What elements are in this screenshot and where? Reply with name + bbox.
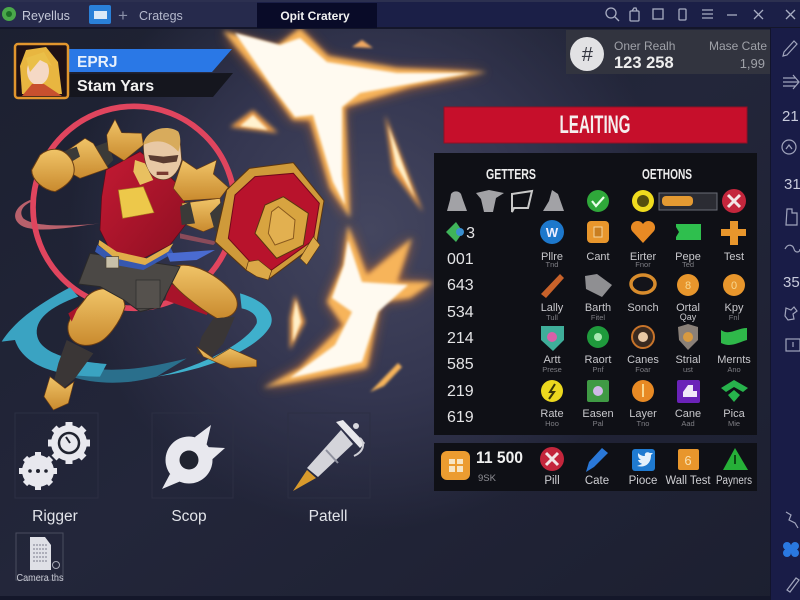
small sublabels: Pal: [593, 419, 604, 428]
row 2 labels: Sonch: [627, 302, 659, 314]
app name: Reyellus: [22, 9, 70, 23]
folder tab icon: [89, 5, 111, 24]
hero character: [2, 106, 324, 410]
chest star: [118, 187, 154, 218]
row numbers: 219: [447, 383, 474, 400]
small sublabels: [542, 260, 741, 428]
row 1 icons: [540, 220, 746, 245]
player badge: [15, 44, 233, 98]
score subtext: 9SK: [478, 473, 497, 484]
right sidebar: [770, 28, 800, 600]
row 4 icons: [541, 380, 748, 403]
icon: yellow coin: [632, 190, 654, 212]
tool: scope: [152, 413, 233, 525]
row numbers: 001: [447, 251, 474, 268]
icon: syringe: [293, 420, 365, 491]
gate label: Mase Cate: [709, 39, 767, 53]
icon: orange grid: [441, 451, 470, 480]
flower icon: [783, 542, 799, 557]
small sublabels: Hoo: [545, 419, 559, 428]
icon: sheet: [30, 537, 60, 570]
shield: [215, 163, 324, 280]
label: Rigger: [32, 508, 78, 525]
tool: rigger: [15, 413, 98, 525]
add tab: +: [118, 6, 128, 25]
belt: [95, 245, 173, 270]
tab name: Crategs: [139, 9, 183, 23]
cyan swirl: [2, 287, 272, 383]
row numbers: 214: [447, 330, 474, 347]
header bar: [0, 0, 800, 29]
strip icons: 6: [684, 453, 692, 468]
icon: gears: [19, 422, 90, 490]
strip labels: [544, 475, 752, 487]
label: Camera ths: [16, 573, 64, 584]
strip labels: Cate: [585, 475, 609, 487]
row 3 labels: [543, 354, 751, 366]
panel: main table: [434, 153, 757, 435]
row 1 labels: Pllre: [541, 251, 563, 263]
icon: ring blade: [162, 425, 225, 489]
row 3 labels: Artt: [543, 354, 561, 366]
row 2 icons: 0: [731, 280, 737, 292]
panel: bottom strip: [434, 443, 757, 491]
row 4 labels: Pica: [723, 408, 746, 420]
row 4 labels: Easen: [582, 408, 614, 420]
window controls: [606, 8, 795, 21]
row numbers: 643: [447, 277, 474, 294]
row 1 labels: Cant: [586, 251, 610, 263]
small sublabels: Fnl: [729, 313, 740, 322]
hash badge: #: [581, 44, 593, 66]
row 2 labels: Ortal: [676, 302, 700, 314]
row 2 labels: Qay: [680, 312, 697, 322]
banner: leading: [444, 107, 747, 143]
row 1 labels: Eirter: [630, 251, 656, 263]
active tab: [257, 3, 377, 28]
icon: green check: [587, 190, 609, 212]
row numbers: 619: [447, 409, 474, 426]
small sublabels: ust: [683, 365, 694, 374]
strip labels: Payners: [716, 475, 752, 487]
realm label: Oner Realh: [614, 39, 675, 53]
red ring: [33, 106, 235, 308]
row 4 labels: [540, 408, 746, 420]
row 2 icons: 8: [685, 280, 691, 292]
row 2 labels: Lally: [541, 302, 564, 314]
row numbers: 3: [466, 225, 475, 242]
label: Patell: [309, 508, 347, 525]
row 1 labels: Test: [724, 251, 744, 263]
tool: document: [16, 533, 64, 584]
name bar: blue: [68, 49, 232, 72]
row 3 labels: Canes: [627, 354, 659, 366]
column heading: getters: GETTERS: [486, 166, 536, 183]
shoulder: right: [173, 160, 228, 201]
row 1 icons: W: [546, 225, 559, 240]
arm: shield side: [182, 198, 223, 232]
column heading: options: OETHONS: [642, 166, 692, 183]
shoulder: left: [107, 119, 143, 161]
stats box: [566, 30, 770, 74]
name bar: black: [68, 73, 233, 97]
icon: gem: [446, 222, 464, 242]
row numbers: 585: [447, 356, 474, 373]
row 1 labels: [541, 251, 744, 263]
row 3 icons: [541, 324, 747, 351]
skirt: [78, 253, 180, 312]
small sublabels: Tull: [546, 313, 558, 322]
row 4 labels: Cane: [675, 408, 701, 420]
small sublabels: Ted: [682, 260, 694, 269]
icon: red cross: [722, 189, 746, 213]
player name: EPRJ: [77, 54, 118, 71]
score: 11 500: [476, 448, 523, 467]
tool: patell: [288, 413, 370, 525]
small sublabels: Ano: [727, 365, 741, 374]
row 4 labels: Rate: [540, 408, 564, 420]
row 2 labels: Kpy: [725, 302, 744, 314]
gate value: 1,99: [740, 56, 765, 71]
small sublabels: Tnd: [546, 260, 558, 269]
row 4 labels: Layer: [629, 408, 657, 420]
head: [133, 128, 182, 185]
torso: [100, 152, 187, 260]
leg: back: [165, 283, 213, 315]
sidebar number 21: 21: [782, 108, 799, 125]
player title: Stam Yars: [77, 78, 154, 95]
row 3 labels: Strial: [675, 354, 701, 366]
small sublabels: Fnor: [635, 260, 651, 269]
small sublabels: Foar: [635, 365, 651, 374]
sidebar icons: [782, 41, 800, 592]
progress bar: [659, 193, 717, 210]
icon row: figures: [447, 190, 564, 212]
small sublabels: Tno: [637, 419, 649, 428]
avatar: [15, 44, 68, 98]
sidebar number 35: 35: [783, 274, 800, 291]
strip labels: Pill: [544, 475, 560, 487]
row numbers: 534: [447, 304, 474, 321]
energy shards: [230, 40, 423, 392]
strip icons: [540, 447, 748, 472]
small sublabels: Aad: [681, 419, 695, 428]
small sublabels: Pnf: [592, 365, 605, 374]
row 2 icons: [541, 274, 745, 298]
label: Scop: [171, 508, 207, 525]
row 2 labels: [541, 302, 744, 322]
small sublabels: Mie: [728, 419, 740, 428]
row 2 labels: Barth: [585, 302, 611, 314]
lower energy flash: [263, 225, 433, 388]
strip labels: Wall Test: [666, 475, 711, 487]
active tab: Opit Cratery: [280, 9, 350, 23]
small sublabels: Prese: [542, 365, 562, 374]
leg: front: [68, 289, 125, 345]
realm value: 123 258: [614, 54, 674, 72]
upper energy flash: [223, 28, 487, 218]
row 1 labels: Pepe: [675, 251, 701, 263]
arm: fist side: [95, 142, 113, 168]
row numbers: [447, 225, 475, 426]
hash badge: [570, 37, 604, 71]
row 3 labels: Raort: [585, 354, 611, 366]
small sublabels: Fitel: [591, 313, 605, 322]
pink swirl: [15, 200, 100, 230]
banner: leading: LEAITING: [560, 111, 630, 139]
app logo: [2, 7, 16, 21]
strip labels: Pioce: [629, 475, 657, 487]
row 3 labels: Mernts: [717, 354, 751, 366]
